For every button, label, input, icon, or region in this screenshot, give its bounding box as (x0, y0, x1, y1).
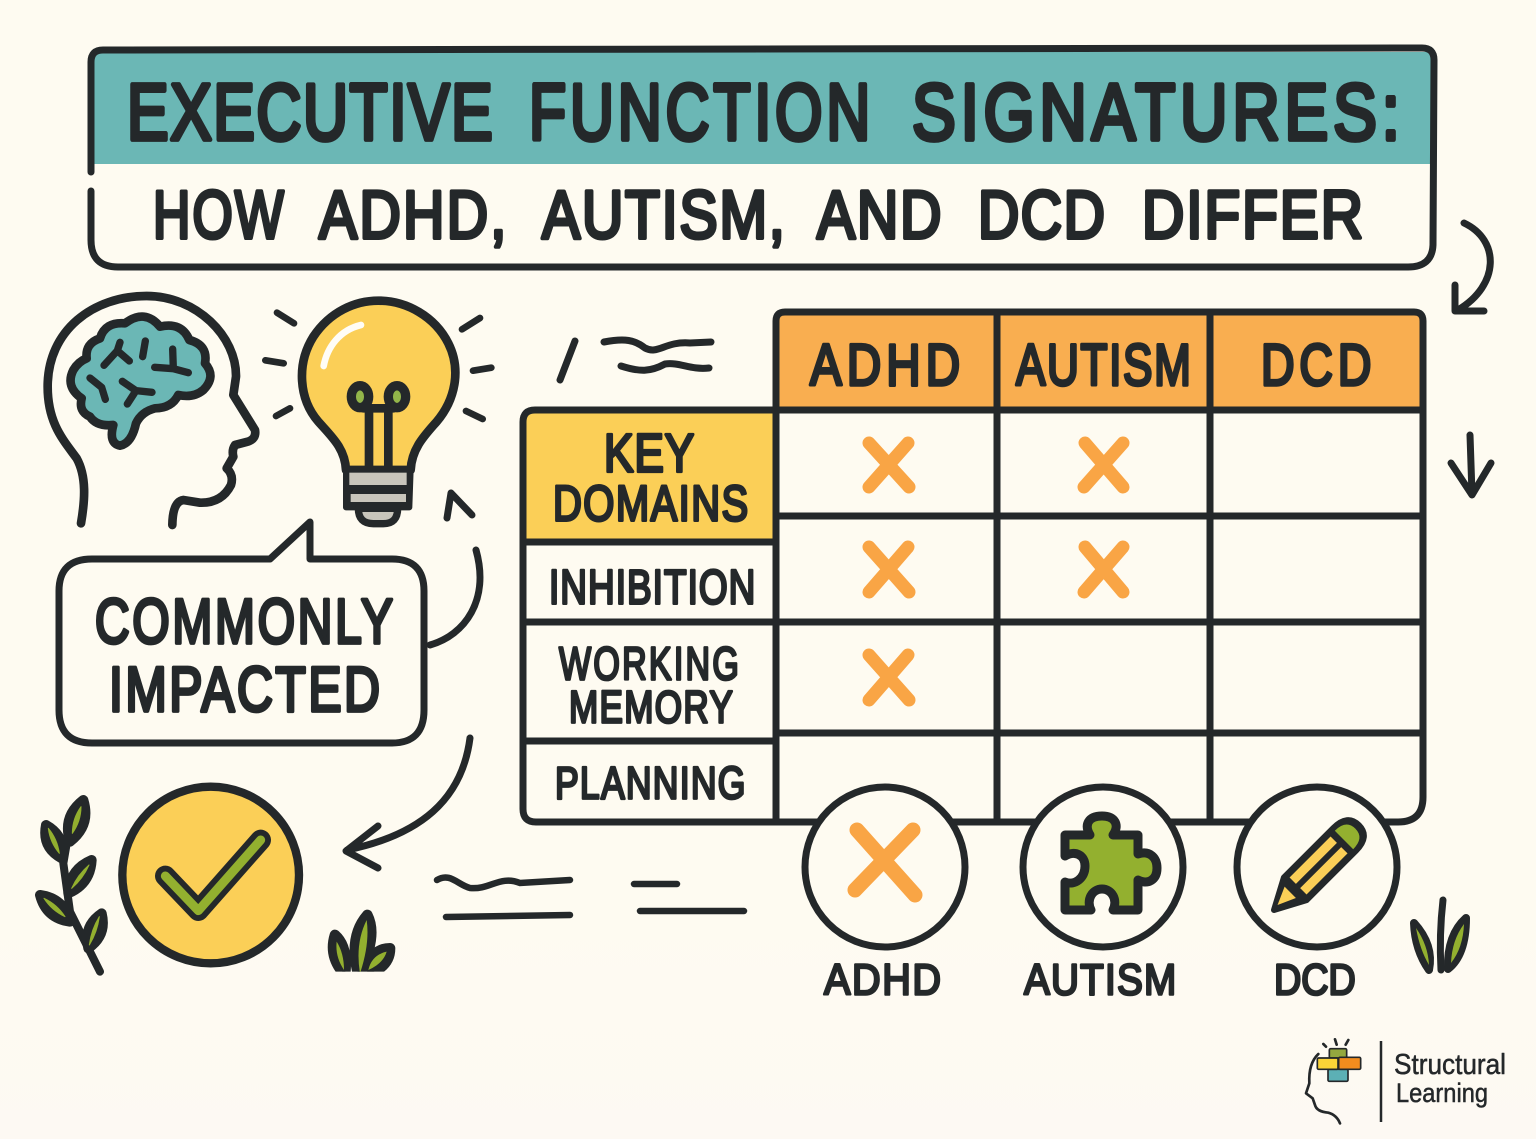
column heading: DCD: DCD (1261, 333, 1371, 398)
legend: ADHD: ADHD (824, 955, 941, 1004)
main title: FUNCTION (529, 69, 870, 158)
callout: commonly impacted: COMMONLY (95, 586, 393, 657)
subtitle: HOW (153, 176, 284, 253)
legend: ADHD (805, 787, 965, 1004)
column heading: AUTISM: AUTISM (1016, 332, 1191, 397)
legend: DCD (1237, 787, 1397, 1004)
row heading: working memory: MEMORY (569, 681, 733, 733)
bulb glass (302, 301, 455, 470)
doodle: squiggles top (560, 340, 711, 380)
main title (127, 67, 1400, 158)
logo: structural learning: Learning (1396, 1078, 1488, 1108)
subtitle: ADHD, (319, 177, 506, 253)
row heading: planning: PLANNING (555, 758, 745, 809)
row heading: key domains: KEY (604, 423, 694, 483)
icon: head with brain (48, 296, 255, 525)
legend: autism (1023, 787, 1183, 1004)
callout: commonly impacted (59, 522, 424, 743)
row heading: key domains (553, 423, 748, 532)
callout: commonly impacted: IMPACTED (109, 656, 380, 725)
row heading: inhibition: INHIBITION (549, 561, 755, 615)
table (523, 312, 1423, 822)
icon: branch (40, 800, 103, 972)
logo: structural learning (1306, 1039, 1506, 1123)
logo icon (1306, 1039, 1361, 1123)
icon: light bulb (265, 301, 491, 524)
main title: EXECUTIVE (127, 68, 493, 157)
subtitle: DIFFER (1142, 178, 1363, 253)
subtitle: DCD (978, 177, 1105, 253)
main title: SIGNATURES: (912, 67, 1400, 157)
icon: check circle (122, 787, 299, 963)
arrow: callout to check (346, 738, 470, 868)
title banner (91, 48, 1434, 267)
row heading: working memory: WORKING (559, 638, 739, 690)
key domains cell (525, 412, 775, 540)
legend: DCD: DCD (1274, 955, 1356, 1004)
arrow: down (1451, 435, 1491, 495)
subtitle: AND (817, 177, 941, 253)
subtitle: AUTISM, (542, 177, 785, 253)
subtitle (153, 176, 1363, 253)
arrow: title to table (1455, 223, 1490, 311)
header cells (778, 314, 1422, 408)
arrow: callout to bulb (430, 493, 480, 645)
logo: structural learning: Structural (1394, 1049, 1506, 1081)
icon: grass right (1414, 900, 1466, 970)
cross marks (869, 443, 1123, 700)
icon: small plant (333, 915, 390, 975)
doodle: squiggles bottom (437, 877, 744, 917)
row heading: key domains: DOMAINS (553, 475, 748, 532)
column heading: ADHD: ADHD (810, 334, 960, 398)
row heading: working memory (559, 638, 739, 733)
legend: autism: AUTISM (1024, 954, 1176, 1004)
